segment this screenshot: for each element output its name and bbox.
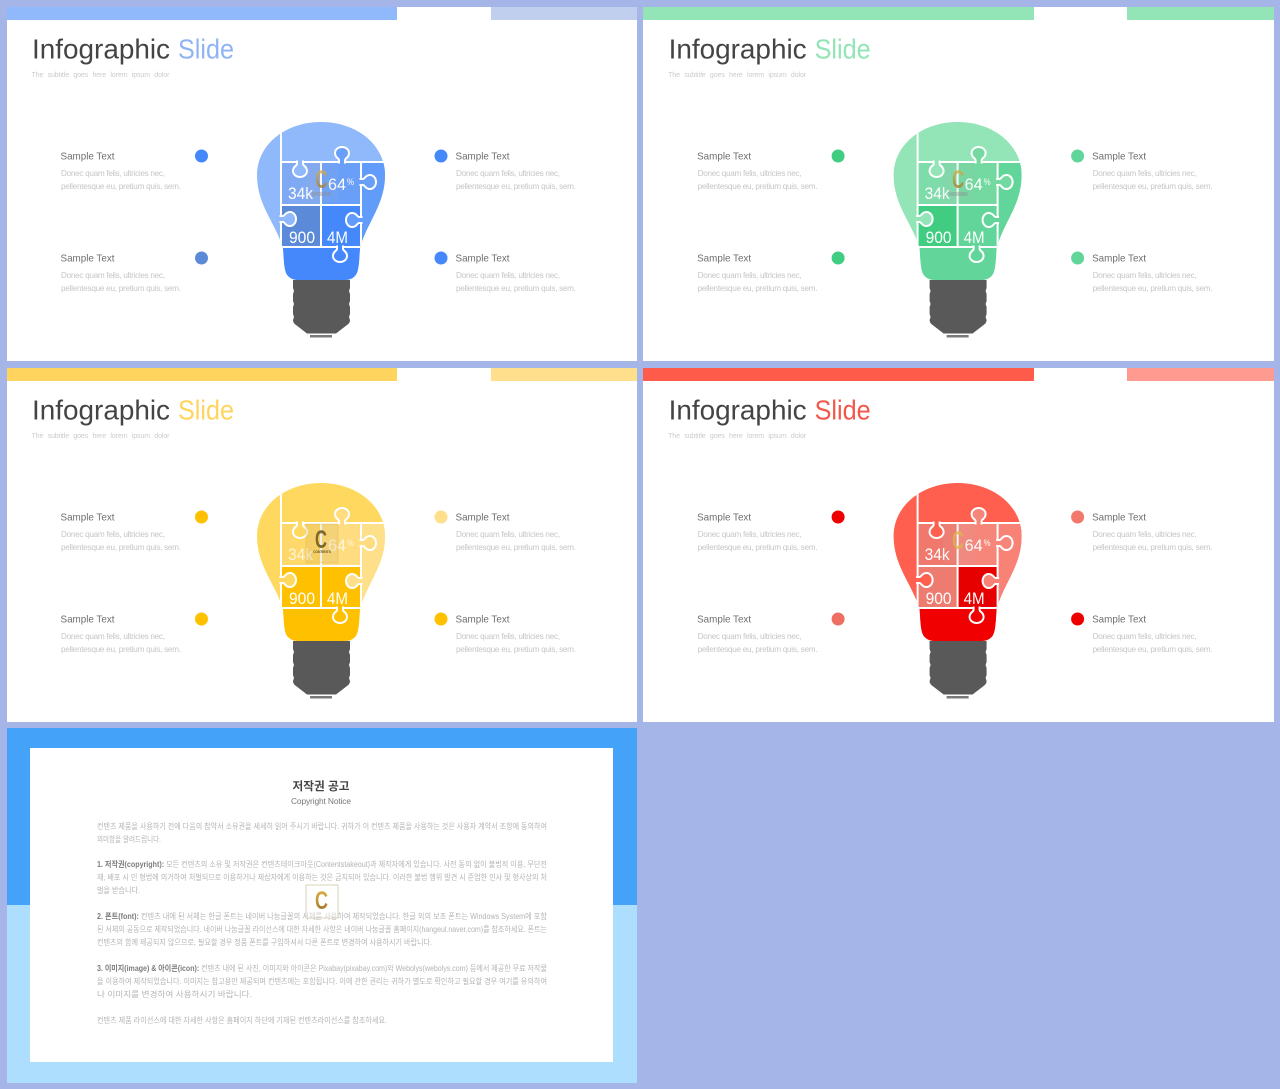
dot: bottom right (434, 612, 448, 626)
text block: bottom left: Sample Text (60, 614, 115, 626)
text block: bottom right: pellentesque eu, pretium quis, sem. (1093, 284, 1213, 293)
text block: top right: pellentesque eu, pretium quis, sem. (456, 543, 576, 552)
text block: bottom left (697, 252, 818, 293)
title: Infographic (32, 34, 170, 64)
dot: top left (832, 510, 845, 524)
title: Infographic (669, 394, 807, 426)
dot: top right (434, 150, 448, 162)
title: Slide (178, 34, 234, 64)
text block: top right: pellentesque eu, pretium quis, sem. (1093, 182, 1213, 191)
text block: top left: Donec quam felis, ultricies nec, (698, 530, 802, 539)
text block: bottom right: pellentesque eu, pretium quis, sem. (456, 284, 576, 293)
text block: bottom right (456, 252, 576, 293)
title (32, 34, 234, 64)
icon: puzzle light bulb red (894, 476, 1032, 698)
dot: top left (195, 150, 208, 162)
header bar: green (643, 7, 1274, 20)
icon: puzzle light bulb yellow: 34k (288, 545, 313, 564)
title: Slide (815, 394, 871, 426)
icon: puzzle light bulb red: 34k (925, 545, 950, 564)
text block: bottom left: Donec quam felis, ultricies nec, (61, 271, 165, 280)
watermark (943, 524, 975, 563)
dot: bottom left (832, 252, 845, 264)
icon: puzzle light bulb blue: 900 (289, 228, 315, 247)
text block: bottom left (697, 614, 818, 654)
icon: puzzle light bulb yellow (257, 483, 385, 698)
icon: puzzle light bulb green: 900 (926, 228, 952, 247)
icon: puzzle light bulb yellow: 64 (328, 536, 346, 555)
text block: top left (697, 150, 818, 191)
text block: bottom left: Donec quam felis, ultricies nec, (698, 632, 802, 641)
text block: top right: Donec quam felis, ultricies nec, (1093, 530, 1197, 539)
header bar: red (643, 368, 1274, 381)
paragraph 1: copyright: 1. 저작권(copyright): 모든 컨텐츠의 소유 및 저작권은 컨텐츠테이크아웃(Contentstakeout)과 제작자에게 있습니다. 사전 동의 없이 불법적 이용, 무단전 (97, 859, 547, 869)
dot: bottom left (832, 612, 845, 626)
text block: bottom left: pellentesque eu, pretium quis, sem. (698, 284, 818, 293)
dot: top right (434, 510, 448, 524)
copyright heading: 저작권 공고 (292, 779, 350, 793)
text block: top left: pellentesque eu, pretium quis, sem. (698, 182, 818, 191)
icon: puzzle light bulb blue: 4M (327, 228, 348, 247)
text block: top left: Donec quam felis, ultricies nec, (698, 169, 802, 178)
text block: top right: Donec quam felis, ultricies nec, (1093, 169, 1197, 178)
closing paragraph: 컨텐츠 제품 라이선스에 대한 자세한 사항은 홈페이지 하단에 기재된 컨텐츠라이선스를 참조하세요. (97, 1015, 387, 1025)
text block: bottom right: Donec quam felis, ultricies nec, (456, 271, 560, 280)
text block: top left: Donec quam felis, ultricies nec, (61, 530, 165, 539)
text block: top right (456, 512, 576, 552)
text block: bottom left: Donec quam felis, ultricies nec, (698, 271, 802, 280)
watermark (943, 163, 975, 202)
text block: top left: pellentesque eu, pretium quis, sem. (61, 543, 181, 552)
text block: top left: Sample Text (60, 512, 115, 524)
paragraph 2: font: 컨텐츠의 함께 제공되지 않으므로, 필요할 경우 정품 폰트를 구입하셔서 다른 폰트로 변경하여 사용하시기 바랍니다. (97, 937, 432, 947)
paragraph 2: font: 된 서체의 공동으로 제작되었습니다. 네이버 나눔글꼴 라이선스에 대한 자세한 사항은 네이버 나눔글꼴 홈페이지(hangeul.naver.com)를 참조하세요. 폰트는 (97, 924, 547, 934)
header bar: yellow (7, 368, 637, 381)
subtitle: The subtitle goes here lorem ipsum dolor (668, 433, 807, 440)
title: Slide (815, 34, 871, 64)
subtitle: The subtitle goes here lorem ipsum dolor (32, 72, 170, 79)
text block: top left: pellentesque eu, pretium quis, sem. (61, 182, 181, 191)
text block: top left: Sample Text (697, 512, 751, 524)
text block: bottom left: pellentesque eu, pretium quis, sem. (61, 645, 181, 654)
text block: top right: Donec quam felis, ultricies nec, (456, 530, 560, 539)
watermark (306, 524, 338, 563)
text block: bottom left: Sample Text (697, 252, 751, 264)
paragraph 3: image and icon: 을 이용하여 제작되었습니다. 이미지는 참고용만 제공되며 컨텐츠에는 포함됩니다. 이에 관한 권리는 귀하가 별도로 확인하고 필요할 경우 여기를 유의하여 (97, 976, 547, 986)
header bar: blue (7, 7, 637, 20)
panel: copyright notice (7, 728, 637, 1083)
text block: top left: Sample Text (697, 150, 751, 162)
icon: puzzle light bulb blue: 64 (328, 175, 346, 194)
dot: bottom right (434, 252, 448, 264)
title (32, 394, 234, 426)
text block: bottom left: pellentesque eu, pretium quis, sem. (698, 645, 818, 654)
icon: puzzle light bulb red: % (984, 538, 991, 548)
panel: red slide (643, 368, 1274, 722)
paragraph 3: image and icon: 3. 이미지(image) & 아이콘(icon): 컨텐츠 내에 된 사진, 이미지와 아이콘은 Pixabay(pixabay.com)와 Webolys(webolys.com) 등에서 제공한 무료 저작물 (97, 963, 547, 973)
intro paragraph (97, 821, 547, 844)
title (669, 34, 871, 64)
watermark: C (952, 527, 964, 555)
icon: puzzle light bulb red: 900 (926, 589, 952, 608)
paragraph 1: copyright: 재, 배포 시 민 형법에 의거하여 처벌되므로 이용하거나 제삼자에게 이용하는 것은 금지되어 있습니다. 이러한 불법 행위 발견 시 준엄한 민사 및 형사상의 처 (97, 872, 547, 882)
paragraph 2: font: 2. 폰트(font): 컨텐츠 내에 된 서체는 한글 폰트는 네이버 나눔글꼴의 서체를 사용하여 제작되었습니다. 한글 외의 보조 폰트는 Windows System에 포함 (97, 911, 548, 921)
icon: puzzle light bulb yellow: 900 (289, 589, 315, 608)
text block: top left: Donec quam felis, ultricies nec, (61, 169, 165, 178)
text block: top right: pellentesque eu, pretium quis, sem. (1093, 543, 1213, 552)
text block: bottom right (1092, 614, 1213, 654)
watermark: C (315, 526, 327, 554)
subtitle: The subtitle goes here lorem ipsum dolor (32, 433, 170, 440)
text block: bottom left: Donec quam felis, ultricies nec, (61, 632, 165, 641)
intro paragraph: 컨텐츠 제품을 사용하기 전에 다음의 참약서 소유권을 세세히 읽어 주시기 바랍니다. 귀하가 이 컨텐츠 제품을 사용하는 것은 사용자 계약서 조항에 동의하여 (97, 821, 547, 831)
watermark: CONTENTS (313, 550, 332, 554)
title (669, 394, 871, 426)
icon: puzzle light bulb yellow: % (347, 538, 354, 548)
text block: top right: Sample Text (1092, 150, 1146, 162)
dot: bottom left (195, 252, 208, 264)
copyright subheading: Copyright Notice (291, 796, 351, 806)
paragraph 1: copyright: 벌을 받습니다. (97, 885, 140, 895)
text block: top left (60, 150, 181, 191)
title: Infographic (669, 34, 807, 64)
subtitle: The subtitle goes here lorem ipsum dolor (668, 72, 807, 79)
text block: bottom right: Donec quam felis, ultricies nec, (1093, 632, 1197, 641)
watermark: C (952, 166, 964, 194)
dot: top right (1071, 510, 1084, 524)
paragraph 2: font (97, 911, 548, 947)
text block: top right: pellentesque eu, pretium quis, sem. (456, 182, 576, 191)
icon: puzzle light bulb red: 64 (965, 536, 983, 555)
dot: bottom right (1071, 252, 1084, 264)
text block: bottom left: pellentesque eu, pretium quis, sem. (61, 284, 181, 293)
text block: top right: Donec quam felis, ultricies nec, (456, 169, 560, 178)
intro paragraph: 의미함을 알려드립니다. (97, 834, 161, 844)
text block: bottom left: Sample Text (60, 252, 115, 264)
icon: puzzle light bulb blue: % (347, 177, 354, 187)
paragraph 1: copyright (97, 859, 547, 895)
icon: puzzle light bulb green: 4M (964, 228, 985, 247)
panel: green slide (643, 7, 1274, 361)
icon: puzzle light bulb green: % (984, 177, 991, 187)
text block: top left: Sample Text (60, 150, 115, 162)
text block: bottom left: Sample Text (697, 614, 751, 626)
text block: bottom right: Donec quam felis, ultricies nec, (456, 632, 560, 641)
text block: bottom left (60, 252, 181, 293)
icon: puzzle light bulb green (894, 115, 1032, 338)
watermark (306, 885, 338, 918)
text block: bottom right (1092, 252, 1213, 293)
dot: top left (195, 510, 208, 524)
text block: bottom right (456, 614, 576, 654)
watermark (306, 163, 338, 202)
text block: bottom right: Sample Text (456, 614, 510, 626)
text block: top right (456, 150, 576, 191)
text block: top left: pellentesque eu, pretium quis, sem. (698, 543, 818, 552)
dot: top left (832, 150, 845, 162)
watermark: C (316, 166, 328, 194)
text block: bottom right: Donec quam felis, ultricies nec, (1093, 271, 1197, 280)
title: Slide (178, 394, 234, 426)
text block: top left (697, 512, 818, 552)
icon: puzzle light bulb yellow: 4M (327, 589, 348, 608)
watermark: C (315, 887, 328, 915)
panel: blue slide (7, 7, 637, 361)
paragraph 3: image and icon: 나 이미지를 변경하여 사용하시기 바랍니다. (97, 989, 252, 999)
text block: bottom right: pellentesque eu, pretium quis, sem. (1093, 645, 1213, 654)
text block: top right: Sample Text (456, 512, 510, 524)
paragraph 3: image and icon (97, 963, 547, 999)
text block: top right (1092, 150, 1213, 191)
text block: bottom right: pellentesque eu, pretium quis, sem. (456, 645, 576, 654)
title: Infographic (32, 394, 170, 426)
text block: top right: Sample Text (456, 150, 510, 162)
dot: bottom right (1071, 612, 1084, 626)
text block: bottom right: Sample Text (1092, 252, 1146, 264)
text block: top left (60, 512, 181, 552)
text block: bottom right: Sample Text (456, 252, 510, 264)
icon: puzzle light bulb blue: 34k (288, 184, 313, 203)
panel: yellow slide (7, 368, 637, 722)
dot: bottom left (195, 612, 208, 626)
text block: bottom right: Sample Text (1092, 614, 1146, 626)
text block: top right (1092, 512, 1213, 552)
icon: puzzle light bulb red: 4M (964, 589, 985, 608)
icon: puzzle light bulb green: 34k (925, 184, 950, 203)
text block: bottom left (60, 614, 181, 654)
icon: puzzle light bulb blue (257, 122, 385, 338)
dot: top right (1071, 150, 1084, 162)
icon: puzzle light bulb green: 64 (965, 175, 983, 194)
text block: top right: Sample Text (1092, 512, 1146, 524)
